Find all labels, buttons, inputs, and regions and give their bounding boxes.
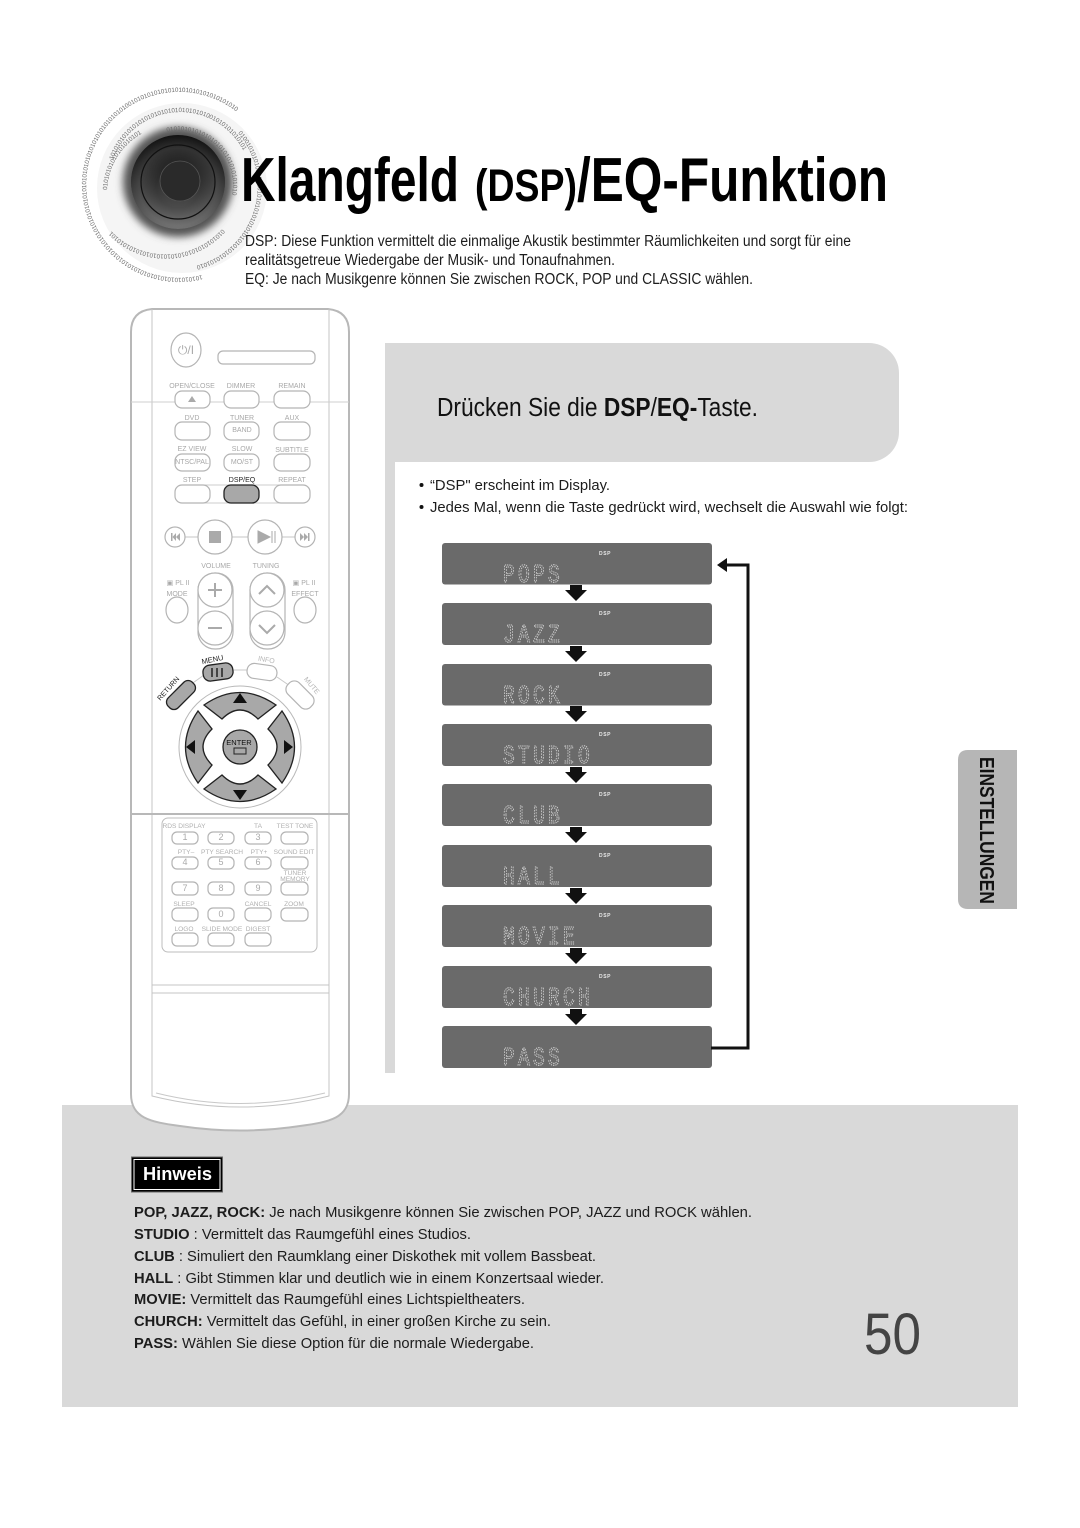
number keypad: DIGEST (246, 926, 270, 933)
display: STUDIO: STUDIO (503, 742, 590, 771)
note text: CLUB : Simuliert den Raumklang einer Diskothek mit vollem Bassbeat. (134, 1248, 596, 1265)
panel: note background (62, 1105, 1018, 1407)
number keypad: 7 (182, 883, 188, 893)
display: JAZZ: DSP (599, 611, 611, 617)
side tab: Einstellungen (958, 750, 1017, 909)
title (241, 146, 888, 215)
note badge: Hinweis (132, 1157, 222, 1192)
number keypad: TA (254, 823, 263, 830)
number keypad: RDS DISPLAY (162, 823, 206, 830)
power button: ⏻/I (178, 343, 194, 357)
arrow (565, 1009, 587, 1025)
menu row buttons: MENU (201, 653, 224, 666)
volume and tuning: MODE (166, 591, 188, 598)
number keypad: 6 (255, 857, 261, 867)
binary text rings: 0100101010101010101010101010101010101010101010101010101010101010101010101010101010101010101010101010101010101010101010101010101010101010 (197, 131, 262, 270)
display: POPS: DSP (599, 551, 611, 557)
number keypad: 2 (218, 832, 224, 842)
heading text: Drücken Sie die DSP/EQ-Taste. (437, 394, 758, 422)
display: STUDIO (442, 724, 712, 771)
page number: 50 (864, 1302, 921, 1367)
top buttons: REMAIN (278, 383, 306, 390)
number keypad (162, 818, 317, 952)
top buttons: NTSC/PAL (175, 459, 209, 466)
note text: HALL : Gibt Stimmen klar und deutlich wie in einem Konzertsaal wieder. (134, 1270, 604, 1287)
intro text: EQ: Je nach Musikgenre können Sie zwischen ROCK, POP und CLASSIC wählen. (245, 271, 753, 288)
note text: MOVIE: Vermittelt das Raumgefühl eines Lichtspieltheaters. (134, 1291, 525, 1308)
top buttons: DSP/EQ (229, 477, 256, 484)
volume and tuning: ▣ PL II (293, 580, 315, 587)
number keypad: 0 (218, 909, 224, 919)
side tab: Einstellungen: EINSTELLUNGEN (975, 757, 997, 904)
top buttons: SUBTITLE (275, 447, 309, 454)
number keypad: SOUND EDIT (274, 849, 314, 856)
binary text rings: 010101010101010101010101010101010101010101010101010101 (109, 230, 224, 259)
number keypad: SLIDE MODE (202, 926, 243, 933)
top buttons: SLOW (232, 446, 253, 453)
volume and tuning: ▣ PL II (167, 580, 189, 587)
binary text rings (82, 88, 262, 282)
number keypad: MEMORY (280, 876, 310, 883)
menu row buttons: INFO (257, 656, 276, 666)
title: Klangfeld (241, 146, 459, 215)
number keypad: LOGO (174, 926, 194, 933)
display: CLUB (442, 784, 712, 831)
note badge: Hinweis: Hinweis (143, 1164, 212, 1184)
title: (DSP) (475, 160, 577, 211)
speaker cone (131, 135, 225, 229)
display: CHURCH (442, 966, 712, 1013)
number keypad: CANCEL (245, 901, 272, 908)
display: JAZZ (442, 603, 712, 650)
volume and tuning: EFFECT (291, 591, 319, 598)
number keypad: 4 (182, 857, 188, 867)
note text: PASS: Wählen Sie diese Option für die normale Wiedergabe. (134, 1335, 534, 1352)
bullet list: “DSP" erscheint im Display. (430, 477, 610, 494)
top buttons: OPEN/CLOSE (169, 383, 215, 390)
bullet list: Jedes Mal, wenn die Taste gedrückt wird, wechselt die Auswahl wie folgt: (430, 499, 908, 516)
number keypad: 1 (182, 832, 188, 842)
menu row buttons: MUTE (302, 676, 320, 696)
display: MOVIE: MOVIE (503, 923, 575, 952)
display: ROCK (442, 664, 712, 711)
panel: instruction heading (385, 343, 899, 1073)
number keypad: TUNER (284, 870, 307, 877)
top buttons (169, 383, 310, 503)
number keypad: 3 (255, 832, 261, 842)
top buttons: EZ VIEW (178, 446, 207, 453)
intro text: DSP: Diese Funktion vermittelt die einmalige Akustik bestimmter Räumlichkeiten und sorgt für eine (245, 233, 851, 250)
display: HALL (442, 845, 712, 892)
number keypad: PTY SEARCH (201, 849, 243, 856)
volume and tuning (166, 563, 319, 649)
binary text rings: 1010101010101010101010101010101010101010101010101010101010101010101010101010010101010101010101010101010101010101010101010101010101010101010101010101010101010100101010101010101010101 (82, 88, 238, 282)
highlighted DSP/EQ button (224, 485, 259, 503)
display: POPS (442, 543, 712, 590)
display: JAZZ: JAZZ (503, 621, 560, 650)
note text: STUDIO : Vermittelt das Raumgefühl eines Studios. (134, 1226, 471, 1243)
volume and tuning: VOLUME (201, 563, 231, 570)
display: PASS: PASS (503, 1044, 560, 1073)
arrow (565, 767, 587, 783)
bullet list (420, 477, 908, 516)
icon: speaker with binary rings (82, 88, 267, 282)
number keypad: TEST TONE (277, 823, 314, 830)
number keypad: 9 (255, 883, 261, 893)
top buttons: BAND (232, 427, 252, 434)
display: POPS: POPS (503, 561, 560, 590)
number keypad: 8 (218, 883, 224, 893)
enter button: ENTER (226, 738, 252, 747)
top buttons: AUX (285, 415, 300, 422)
top buttons: TUNER (230, 415, 254, 422)
number keypad: SLEEP (173, 901, 195, 908)
number keypad: PTY+ (251, 849, 267, 856)
display: CLUB: DSP (599, 792, 611, 798)
remote body (131, 309, 349, 1130)
title: /EQ-Funktion (577, 146, 888, 215)
number keypad: ZOOM (284, 901, 304, 908)
note text (134, 1204, 752, 1352)
top buttons: DVD (185, 415, 199, 422)
arrow (565, 585, 587, 601)
top buttons: DIMMER (227, 383, 255, 390)
display: STUDIO: DSP (599, 732, 611, 738)
display slot (218, 351, 315, 364)
arrow (565, 888, 587, 904)
intro text: realitätsgetreue Wiedergabe der Musik- und Tonaufnahmen. (245, 252, 615, 269)
display sequence (442, 543, 712, 1073)
display: MOVIE: DSP (599, 913, 611, 919)
remote control (131, 309, 349, 1130)
transport buttons (165, 520, 315, 554)
display: CHURCH: DSP (599, 974, 611, 980)
arrow (565, 706, 587, 722)
number keypad: 5 (218, 857, 224, 867)
note text: CHURCH: Vermittelt das Gefühl, in einer großen Kirche zu sein. (134, 1313, 551, 1330)
navigation pad (179, 686, 301, 808)
top buttons: MO/ST (231, 459, 254, 466)
display: ROCK: DSP (599, 672, 611, 678)
volume and tuning: TUNING (253, 563, 279, 570)
display: ROCK: ROCK (503, 682, 560, 711)
top buttons: STEP (183, 477, 201, 484)
display: PASS (442, 1026, 712, 1073)
intro text (245, 233, 851, 288)
display: CHURCH: CHURCH (503, 984, 590, 1013)
arrow (565, 827, 587, 843)
top buttons: REPEAT (278, 477, 306, 484)
display: HALL: HALL (503, 863, 560, 892)
power button (171, 333, 201, 367)
arrow (565, 646, 587, 662)
display: MOVIE (442, 905, 712, 952)
display: CLUB: CLUB (503, 802, 560, 831)
arrow (565, 948, 587, 964)
note text: POP, JAZZ, ROCK: Je nach Musikgenre können Sie zwischen POP, JAZZ und ROCK wählen. (134, 1204, 752, 1221)
arrow: return loop (711, 558, 748, 1048)
display: HALL: DSP (599, 853, 611, 859)
number keypad: PTY– (178, 849, 195, 856)
menu row buttons (157, 653, 320, 712)
menu row buttons: RETURN (157, 676, 181, 702)
